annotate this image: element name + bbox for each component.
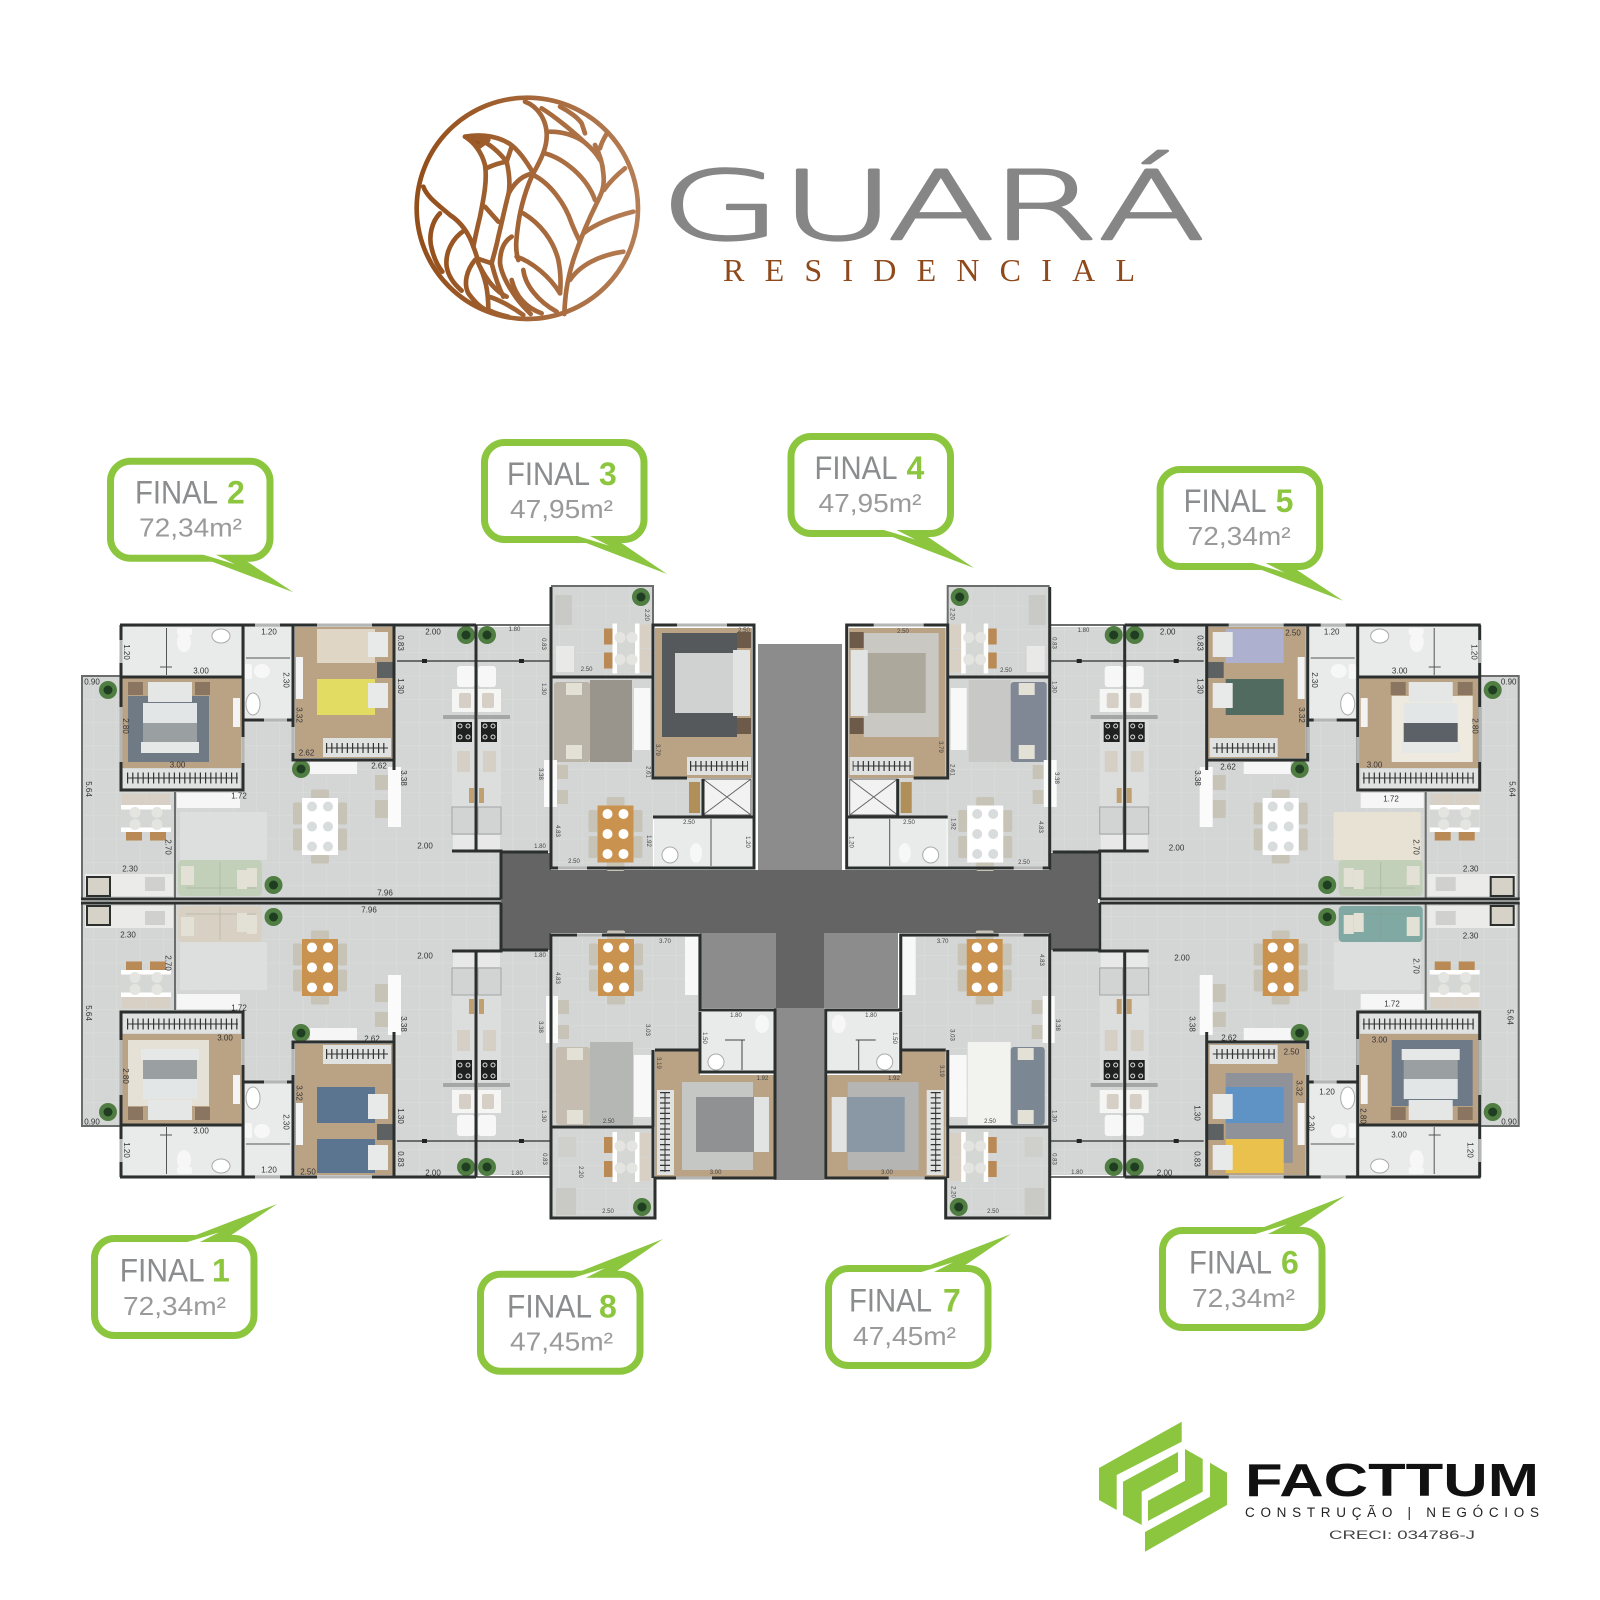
dimension labels: final 1: 0.90 [84,1118,100,1126]
dimension labels: final 8: 0.83 [541,1153,547,1165]
dimension labels: final 4: 4.83 [1037,821,1043,833]
floor plan: final 1 [81,903,552,1177]
dimension labels: final 4: 3.38 [1053,772,1059,784]
callout: final 1: FINAL [120,1253,205,1289]
dimension labels: final 3: 1.80 [534,844,546,850]
dimension labels: final 5: 2.30 [1463,864,1479,874]
dimension labels: final 6: 3.00 [1372,1036,1388,1044]
floor plan: final 5 [1049,625,1520,899]
floor plan: final 2 [81,625,552,899]
dimension labels: final 5: 2.62 [1220,762,1236,772]
callout: final 7: 7 [943,1283,961,1319]
dimension labels: final 7: 1.80 [865,1013,877,1019]
callout: final 2: 72,34m² [139,513,242,543]
callout: final 3: 47,95m² [510,494,613,524]
dimension labels: final 6: 2.30 [1463,932,1479,940]
callout: final 3: 3 [599,456,617,492]
dimension labels: final 6 [1157,932,1517,1178]
dimension labels: final 8: 3.00 [710,1170,722,1176]
dimension labels: final 5: 3.38 [1193,770,1202,786]
callout: final 6: FINAL [1189,1245,1272,1281]
callout: final 6: 6 [1281,1245,1299,1281]
callout: final 5: FINAL [1184,483,1267,519]
dimension labels: final 6: 2.70 [1412,958,1420,974]
dimension labels: final 6: 3.38 [1188,1016,1196,1032]
dimension labels: final 2: 3.00 [193,666,209,676]
dimension labels: final 3: 3.79 [654,744,660,756]
callout: final 8: FINAL [507,1288,592,1324]
dimension labels: final 1: 2.30 [282,1114,290,1130]
dimension labels: final 6: 1.72 [1384,1000,1400,1008]
dimension labels: final 3: 2.50 [581,667,593,673]
dimension labels: final 4 [848,608,1090,866]
callout: final 2: 2 [227,475,245,511]
dimension labels: final 5: 1.20 [1324,628,1340,636]
dimension labels: final 7: 2.20 [950,1186,956,1198]
dimension labels: final 3: 4.83 [554,825,560,837]
dimension labels: final 8: 1.50 [701,1032,707,1044]
dimension labels: final 6: 2.80 [1358,1108,1368,1124]
dimension labels: final 2: 2.70 [164,839,172,855]
dimension labels: final 7: 2.50 [984,1119,996,1125]
dimension labels: final 2: 0.90 [84,678,100,686]
dimension labels: final 2: 1.72 [231,792,247,800]
dimension labels: final 7: 1.50 [891,1032,897,1044]
dimension labels: final 2: 2.80 [121,718,130,734]
dimension labels: final 7: 4.83 [1038,954,1044,966]
callout: final 8: 47,45m² [510,1327,613,1357]
dimension labels: final 3: 1.30 [540,683,546,695]
dimension labels: final 1 [84,906,441,1178]
dimension labels: final 5: 2.70 [1412,839,1420,855]
dimension labels: final 5: 2.00 [1169,844,1185,852]
dimension labels: final 4: 2.50 [1000,668,1012,674]
dimension labels: final 6: 3.32 [1294,1080,1304,1096]
dimension labels: final 8: 3.19 [655,1057,661,1069]
dimension labels: final 8: 2.20 [577,1166,583,1178]
logo subtitle: RESIDENCIAL: RESIDENCIAL [723,252,1135,288]
dimension labels: final 6: 1.20 [1466,1142,1474,1158]
dimension labels: final 8: 1.80 [534,953,546,959]
dimension labels: final 4: 3.79 [937,741,943,753]
dimension labels: final 2: 2.62 [371,762,387,770]
dimension labels: final 1: 2.50 [300,1168,316,1176]
callout: final 2: FINAL [135,475,218,511]
dimension labels: final 2: 2.00 [425,628,441,636]
dimension labels: final 5: 3.00 [1392,666,1408,676]
dimension labels: final 3: 2.50 [683,820,695,826]
dimension labels: final 3: 3.38 [537,768,543,780]
dimension labels: final 8: 2.50 [603,1119,615,1125]
dimension labels: final 1: 3.00 [217,1034,233,1042]
dimension labels: final 6: 2.50 [1284,1048,1300,1056]
dimension labels: final 5: 3.32 [1297,707,1306,723]
dimension labels: final 1: 0.83 [396,1151,405,1167]
dimension labels: final 6: 2.62 [1221,1034,1237,1042]
dimension labels: final 2: 3.00 [170,760,186,770]
building core: corridors [501,644,1098,1180]
dimension labels: final 4: 2.50 [903,820,915,826]
dimension labels: final 4: 2.61 [949,764,955,776]
dimension labels: final 1: 1.30 [396,1108,405,1124]
dimension labels: final 2: 7.96 [377,888,393,898]
callout: final 3: FINAL [507,456,590,492]
dimension labels: final 6: 0.83 [1192,1151,1202,1167]
dimension labels: final 5 [1160,628,1517,874]
callout: final 7 [828,1234,1011,1366]
dimension labels: final 4: 2.50 [1018,860,1030,866]
callout: final 4: 47,95m² [818,488,922,518]
dimension labels: final 1: 7.96 [361,906,377,914]
dimension labels: final 7: 3.00 [881,1170,893,1176]
dimension labels: final 5: 0.83 [1196,635,1204,651]
logo tagline: CONSTRUÇÃO | NEGÓCIOS [1245,1505,1539,1520]
dimension labels: final 2: 2.30 [282,672,290,688]
dimension labels: final 4: 2.50 [897,629,909,635]
dimension labels: final 8: 1.92 [757,1076,769,1082]
dimension labels: final 4: 1.30 [1051,681,1057,693]
dimension labels: final 8: 1.30 [540,1110,546,1122]
dimension labels: final 5: 0.90 [1501,678,1517,686]
dimension labels: final 2: 1.30 [396,678,405,694]
dimension labels: final 2 [84,628,441,898]
dimension labels: final 3: 2.20 [643,609,649,621]
dimension labels: final 3: 2.61 [645,766,651,778]
dimension labels: final 4: 2.20 [949,608,955,620]
dimension labels: final 4: 0.83 [1051,637,1057,649]
dimension labels: final 1: 5.64 [84,1005,93,1021]
dimension labels: final 7: 3.03 [949,1029,955,1041]
dimension labels: final 2: 2.30 [122,864,138,874]
dimension labels: final 1: 2.00 [425,1168,441,1178]
callout: final 7: FINAL [849,1283,932,1319]
floor plan: final 7 [826,930,1055,1218]
dimension labels: final 1: 3.00 [193,1126,209,1136]
dimension labels: final 5: 2.30 [1310,672,1319,688]
callout: final 3 [484,442,667,574]
floor plan: final 3 [544,586,754,871]
dimension labels: final 3: 0.83 [540,638,546,650]
dimension labels: final 8: 1.80 [730,1013,742,1019]
callout: final 7: 47,45m² [853,1321,956,1351]
dimension labels: final 4: 1.80 [1078,628,1090,634]
dimension labels: final 7: 2.50 [987,1209,999,1215]
dimension labels: final 7: 1.92 [888,1076,900,1082]
dimension labels: final 7: 0.83 [1051,1153,1057,1165]
dimension labels: final 5: 1.72 [1383,794,1399,804]
dimension labels: final 8: 3.03 [644,1024,650,1036]
dimension labels: final 5: 5.64 [1508,781,1516,797]
floor plan: final 4 [847,586,1057,871]
dimension labels: final 6: 2.00 [1157,1168,1173,1178]
dimension labels: final 2: 0.83 [396,635,405,651]
dimension labels: final 8: 3.70 [659,939,671,945]
dimension labels: final 7: 3.38 [1054,1019,1060,1031]
dimension labels: final 1: 1.20 [122,1142,131,1158]
dimension labels: final 6: 1.20 [1319,1088,1335,1096]
dimension labels: final 1: 2.30 [120,930,136,940]
dimension labels: final 8: 1.80 [511,1171,523,1177]
dimension labels: final 3 [509,609,750,865]
dimension labels: final 1: 1.72 [231,1004,247,1012]
dimension labels: final 1: 1.20 [261,1166,277,1174]
dimension labels: final 5: 1.30 [1196,678,1204,694]
dimension labels: final 4: 1.20 [848,836,854,848]
callout: final 8 [480,1239,663,1371]
dimension labels: final 3: 1.20 [744,836,750,848]
callout: final 4: 4 [906,450,924,486]
dimension labels: final 8: 3.38 [537,1021,543,1033]
dimension labels: final 2: 3.32 [294,707,304,723]
dimension labels: final 7: 1.30 [1051,1110,1057,1122]
dimension labels: final 6: 5.64 [1506,1009,1514,1025]
callout: final 6 [1162,1196,1345,1328]
dimension labels: final 1: 3.32 [294,1085,304,1101]
logo wordmark: FACTTUM: FACTTUM [1245,1454,1539,1506]
dimension labels: final 3: 1.80 [509,627,521,633]
dimension labels: final 2: 3.38 [399,770,408,786]
dimension labels: final 1: 2.80 [121,1068,130,1084]
dimension labels: final 3: 1.92 [645,835,651,847]
dimension labels: final 3: 2.50 [738,628,750,634]
callout: final 6: 72,34m² [1192,1283,1295,1313]
CRECI registration: CRECI: 034786-J [1329,1528,1475,1542]
dimension labels: final 5: 3.00 [1367,760,1383,770]
floor plan: final 8 [546,930,775,1218]
callout: final 5 [1160,470,1343,601]
dimension labels: final 3: 2.50 [568,859,580,865]
dimension labels: final 8: 4.83 [554,972,560,984]
floor plan: final 6 [1049,903,1520,1177]
dimension labels: final 1: 3.38 [399,1016,408,1032]
logo: Guará leaf emblem [417,98,638,319]
dimension labels: final 1: 2.00 [417,952,433,960]
dimension labels: final 2: 5.64 [84,781,93,797]
dimension labels: final 6: 3.00 [1391,1130,1407,1140]
callout: final 4 [791,436,974,568]
dimension labels: final 6: 1.30 [1192,1105,1202,1121]
dimension labels: final 5: 2.00 [1160,628,1176,636]
dimension labels: final 2: 1.20 [261,628,277,636]
callout: final 1 [94,1204,277,1336]
callout: final 2 [110,461,293,592]
dimension labels: final 8 [511,939,769,1215]
callout: final 5: 5 [1276,483,1293,519]
dimension labels: final 6: 0.90 [1501,1118,1517,1126]
dimension labels: final 2: 1.20 [122,644,131,660]
dimension labels: final 4: 1.92 [950,818,956,830]
callout: final 1: 1 [212,1253,230,1289]
logo wordmark: GUARÁ: GUARÁ [660,150,1205,262]
dimension labels: final 1: 2.70 [164,955,172,971]
dimension labels: final 2: 2.00 [417,842,433,850]
logo: Factum green mark [1099,1422,1227,1552]
callout: final 4: FINAL [814,450,898,486]
callout: final 8: 8 [599,1288,617,1324]
dimension labels: final 7 [865,939,1083,1215]
callout: final 1: 72,34m² [123,1291,226,1321]
dimension labels: final 2: 2.62 [299,748,315,758]
dimension labels: final 8: 2.50 [602,1209,614,1215]
dimension labels: final 5: 2.80 [1470,718,1480,734]
dimension labels: final 1: 2.62 [364,1034,380,1044]
dimension labels: final 7: 3.19 [938,1065,944,1077]
dimension labels: final 6: 2.00 [1174,954,1190,962]
dimension labels: final 6: 2.30 [1306,1115,1316,1131]
dimension labels: final 5: 2.50 [1285,628,1301,638]
dimension labels: final 7: 1.80 [1071,1170,1083,1176]
callout: final 5: 72,34m² [1188,521,1291,551]
dimension labels: final 7: 3.70 [937,939,949,945]
dimension labels: final 5: 1.20 [1470,644,1478,660]
